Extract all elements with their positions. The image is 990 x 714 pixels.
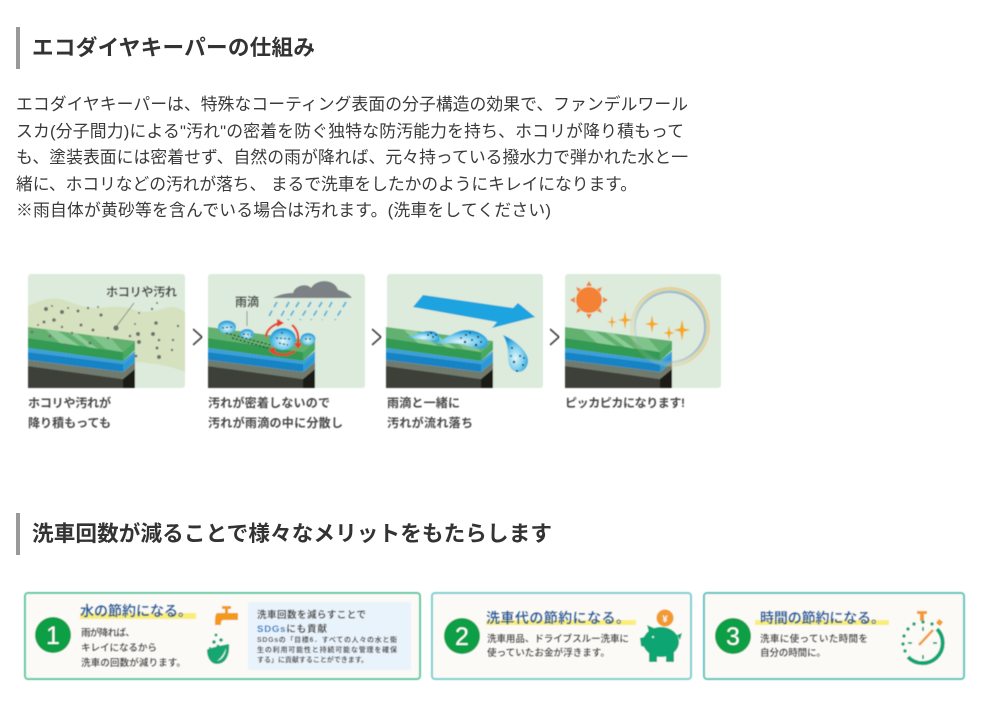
caption: step 3 <box>387 395 473 430</box>
coated slab <box>28 327 135 388</box>
number badge 1 <box>35 617 71 653</box>
heading: how it works: エコダイヤキーパーの仕組み <box>32 35 315 60</box>
coated slab <box>208 327 315 388</box>
icon: yen coin <box>656 610 674 626</box>
leader line <box>116 303 134 327</box>
panel: merit 3 time saving <box>704 593 964 679</box>
raindrops <box>218 320 316 350</box>
number badge 1: 1 <box>46 622 60 650</box>
rainbow ring <box>631 288 709 366</box>
caption: step 2: 汚れが雨滴の中に分散し <box>208 415 343 430</box>
large flow arrow <box>413 295 535 328</box>
description: 洗車の回数が減ります。 <box>81 657 186 669</box>
dirt specks <box>222 327 311 348</box>
rain <box>269 302 346 320</box>
caption: step 3: 汚れが流れ落ち <box>387 415 473 430</box>
panel: step 1 dust settles <box>28 274 185 388</box>
description: 使っていたお金が浮きます。 <box>487 647 610 659</box>
text block: explanation: エコダイヤキーパーは、特殊なコーティング表面の分子構造の効果で、ファンデルワール <box>16 94 688 114</box>
description: 自分の時間に。 <box>760 647 826 659</box>
title: 洗車代の節約になる。 <box>486 610 630 626</box>
title underline <box>80 613 196 619</box>
caption: step 3: 雨滴と一緒に <box>387 395 460 410</box>
panel: SDGs note: SDGsにも貢献 <box>257 623 327 635</box>
caption: step 1 <box>28 395 111 430</box>
arrow: step 2 to 3 <box>372 329 381 345</box>
panel: SDGs note: SDGsの「目標6．すべての人々の水と衛 <box>257 635 397 644</box>
caption: step 4: ピッカピカになります! <box>565 396 685 410</box>
red circulation arrows <box>266 323 298 355</box>
title: 水の節約になる。 <box>80 603 192 619</box>
number badge 3 <box>715 618 751 654</box>
description: 雨が降れば、 <box>81 627 135 639</box>
description: 洗車用品、ドライブスルー洗車に <box>487 633 629 645</box>
heading: how it works <box>16 27 315 69</box>
sparkles <box>607 316 617 328</box>
text block: explanation: スカ(分子間力)による"汚れ"の密着を防ぐ独特な防汚能力を持ち、ホコリが降り積もって <box>16 122 684 141</box>
droplets with dirt <box>407 330 528 372</box>
arrow: step 3 to 4 <box>550 329 559 345</box>
label: dust and dirt: ホコリや汚れ <box>106 284 177 299</box>
number badge 2 <box>444 618 480 654</box>
number badge 3: 3 <box>726 623 740 651</box>
icon: stopwatch <box>901 611 943 663</box>
number badge 2: 2 <box>455 623 469 651</box>
title underline <box>755 620 889 625</box>
description: キレイになるから <box>81 643 157 654</box>
text block: explanation: も、塗装表面には密着せず、自然の雨が降れば、元々持っている撥水力で弾かれた水と一 <box>16 148 688 167</box>
caption: step 2 <box>208 395 343 430</box>
dust cloud <box>28 299 185 372</box>
panel: merit 1 water saving <box>25 593 420 679</box>
caption: step 2: 汚れが密着しないので <box>208 395 330 410</box>
description <box>487 633 629 659</box>
label: raindrop: 雨滴 <box>235 294 259 309</box>
title underline <box>486 620 636 625</box>
description <box>81 627 186 669</box>
icon: faucet <box>215 606 238 625</box>
description: 洗車に使っていた時間を <box>760 633 868 645</box>
arrow: step 1 to 2 <box>193 329 202 345</box>
text block: explanation: 緒に、ホコリなどの汚れが落ち、 まるで洗車をしたかのようにキレイになります。 <box>16 175 637 194</box>
coated slab <box>386 327 493 388</box>
text block: explanation <box>16 94 688 220</box>
panel: SDGs note: 生の利用可能性と持続可能な管理を確保 <box>257 645 397 654</box>
panel: step 4 sparkling clean <box>565 274 721 388</box>
heading: merits: 洗車回数が減ることで様々なメリットをもたらします <box>32 521 552 546</box>
caption: step 1: 降り積もっても <box>28 415 111 430</box>
text block: explanation: ※雨自体が黄砂等を含んでいる場合は汚れます。(洗車をしてください) <box>16 201 551 220</box>
heading: merits <box>16 513 552 555</box>
icon: yen coin: ¥ <box>662 614 668 624</box>
dirt specks <box>427 332 525 372</box>
title: 時間の節約になる。 <box>760 610 885 626</box>
dust particles <box>31 302 179 359</box>
panel: merit 2 car wash cost saving <box>432 593 691 679</box>
panel: SDGs note: 洗車回数を減らすことで <box>257 609 366 621</box>
rain cloud <box>273 281 352 298</box>
panel: SDGs note <box>248 602 411 670</box>
description <box>760 633 868 659</box>
icon: piggy bank <box>640 625 682 662</box>
caption: step 1: ホコリや汚れが <box>28 395 111 410</box>
panel: SDGs note: する」に貢献することができます。 <box>257 655 368 664</box>
sun <box>570 281 608 319</box>
coated slab <box>565 327 672 388</box>
panel: step 3 dirt flows off <box>386 274 543 388</box>
icon: water drop with bubbles <box>207 634 229 664</box>
panel: step 2 dirt disperses in raindrops <box>208 274 365 388</box>
